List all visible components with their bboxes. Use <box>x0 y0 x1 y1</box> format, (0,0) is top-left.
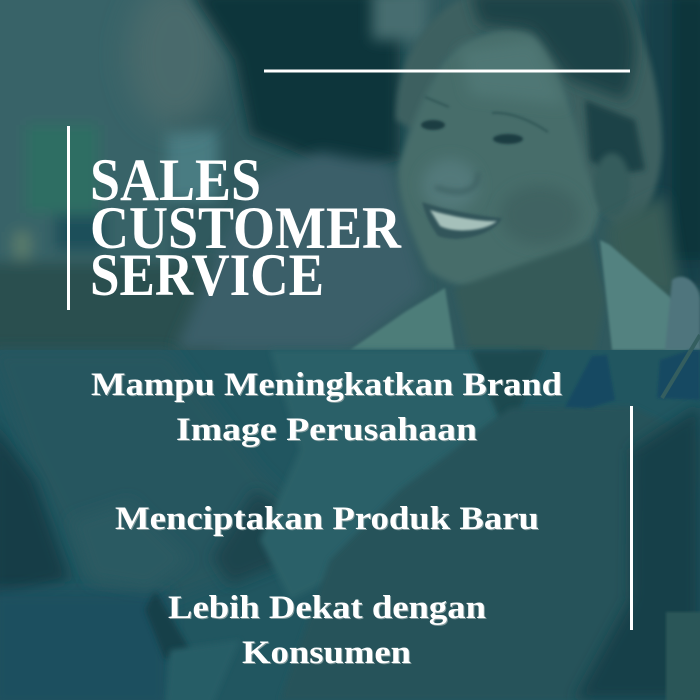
hand at right <box>665 277 700 350</box>
blurred office wall <box>0 0 220 362</box>
benefit: brand image: Image Perusahaan <box>176 412 477 448</box>
hair <box>396 0 662 235</box>
mouth <box>422 202 502 239</box>
benefit: brand image: Image Perusahaan <box>177 413 478 449</box>
benefit: new product: Menciptakan Produk Baru <box>115 501 539 537</box>
title: CUSTOMER <box>90 195 402 261</box>
lower panel overlay <box>0 350 700 700</box>
blazer and right skin <box>605 195 680 300</box>
ear <box>594 153 630 217</box>
neck <box>455 240 605 350</box>
collar <box>350 288 455 350</box>
title: SERVICE <box>90 242 324 308</box>
background woman: blouse <box>175 152 425 350</box>
eyes and brows <box>421 97 548 144</box>
benefit: closer to consumers: Lebih Dekat dengan <box>169 591 487 627</box>
bag / document <box>280 406 700 700</box>
card and hand <box>212 490 335 585</box>
title <box>90 147 402 308</box>
shirt <box>260 350 520 600</box>
blue badge shapes <box>565 355 615 408</box>
benefit: closer to consumers: Konsumen <box>243 636 412 672</box>
benefit: brand image: Mampu Meningkatkan Brand <box>91 367 562 403</box>
title: SALES <box>90 147 261 213</box>
benefit: closer to consumers: Konsumen <box>242 635 411 671</box>
face <box>398 31 600 288</box>
lower photo: blouse and arm <box>0 350 330 600</box>
left vertical rule <box>67 126 70 310</box>
benefit: brand image: Mampu Meningkatkan Brand <box>92 368 563 404</box>
benefit: closer to consumers <box>168 590 487 672</box>
background woman: dark hair <box>190 0 400 175</box>
benefit: new product: Menciptakan Produk Baru <box>116 502 540 538</box>
nose shadow <box>435 172 478 192</box>
top horizontal rule <box>264 70 630 72</box>
benefit: brand image <box>91 367 563 449</box>
background woman: face <box>127 0 223 127</box>
right dark background <box>640 0 700 290</box>
benefit: closer to consumers: Lebih Dekat dengan <box>168 590 486 626</box>
right vertical rule <box>630 406 633 630</box>
top light background by hair <box>372 0 427 40</box>
